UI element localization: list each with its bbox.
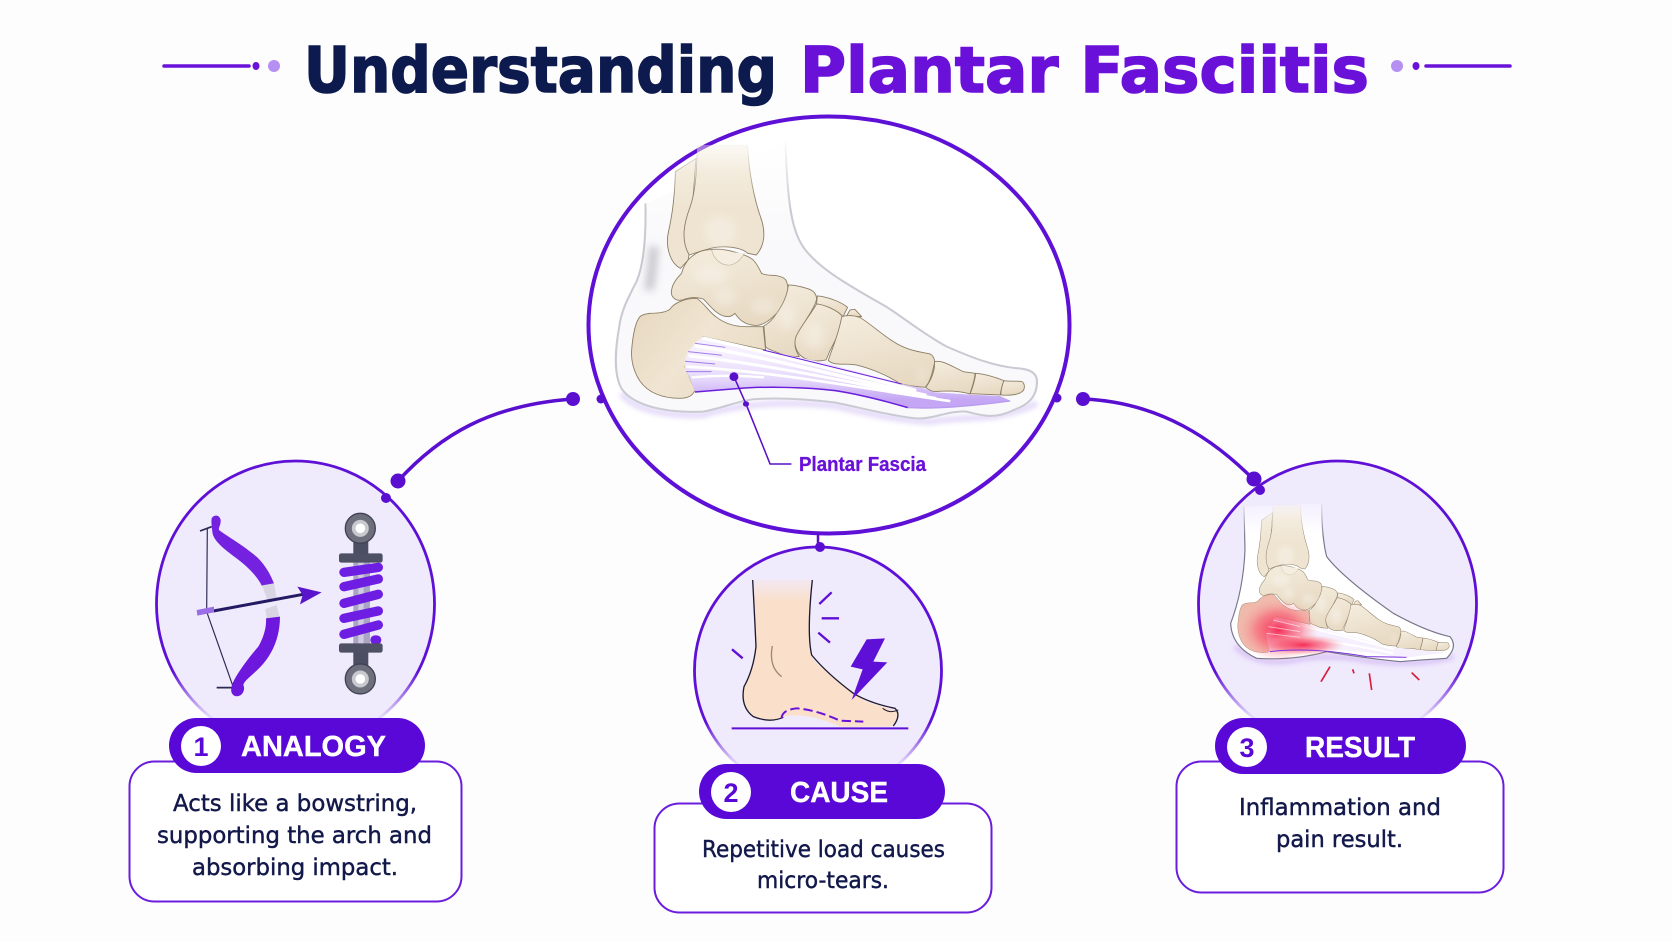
connector: center to result — [1052, 392, 1256, 482]
badge: cause — [699, 764, 945, 819]
leader dots — [729, 372, 791, 464]
connector: center to analogy — [390, 392, 606, 488]
badge: cause: CAUSE — [790, 777, 888, 809]
description text: pain result. — [1276, 825, 1403, 853]
foot skeleton illustration — [616, 140, 1037, 464]
badge: analogy: ANALOGY — [241, 731, 386, 763]
description text: Acts like a bowstring, — [173, 789, 417, 817]
cause circle — [694, 547, 942, 794]
panel: analogy — [130, 461, 462, 902]
badge: result: 3 — [1239, 733, 1255, 763]
title line left — [164, 60, 280, 72]
description box — [130, 762, 462, 902]
panel: result — [1176, 461, 1504, 892]
badge: analogy — [169, 718, 425, 773]
description text — [702, 835, 945, 894]
description text: Inflammation and — [1239, 793, 1441, 821]
description box — [654, 804, 992, 912]
connector node — [381, 493, 391, 503]
icon: foot under load — [732, 580, 908, 728]
panel: cause — [654, 532, 992, 912]
stem to cause circle — [817, 532, 819, 547]
description text: supporting the arch and — [157, 821, 432, 849]
description text: Repetitive load causes — [702, 835, 945, 863]
badge: analogy: 1 — [193, 732, 209, 762]
badge: cause: 2 — [723, 778, 739, 808]
badge: result — [1215, 718, 1466, 774]
icon: bow and arrow — [197, 516, 322, 696]
connector dots — [1246, 472, 1265, 495]
label: Plantar Fascia: Plantar Fascia — [799, 454, 927, 476]
icon: inflamed foot — [1231, 503, 1453, 690]
analogy circle — [156, 461, 434, 747]
description text: absorbing impact. — [192, 853, 398, 881]
title text: Understanding — [304, 34, 777, 107]
plantar fascia band — [685, 337, 1010, 408]
title text: Plantar Fasciitis — [800, 34, 1369, 107]
description text — [157, 789, 432, 881]
description text — [1239, 793, 1441, 853]
icon: shock absorber — [339, 513, 383, 694]
description text: micro-tears. — [757, 866, 889, 894]
title line right — [1391, 60, 1510, 72]
badge: result: RESULT — [1305, 732, 1415, 764]
title — [164, 34, 1510, 107]
connector node — [815, 542, 825, 552]
central circle — [588, 116, 1070, 534]
description box — [1176, 762, 1504, 892]
result circle — [1198, 461, 1476, 747]
panel: central foot anatomy — [588, 116, 1070, 534]
